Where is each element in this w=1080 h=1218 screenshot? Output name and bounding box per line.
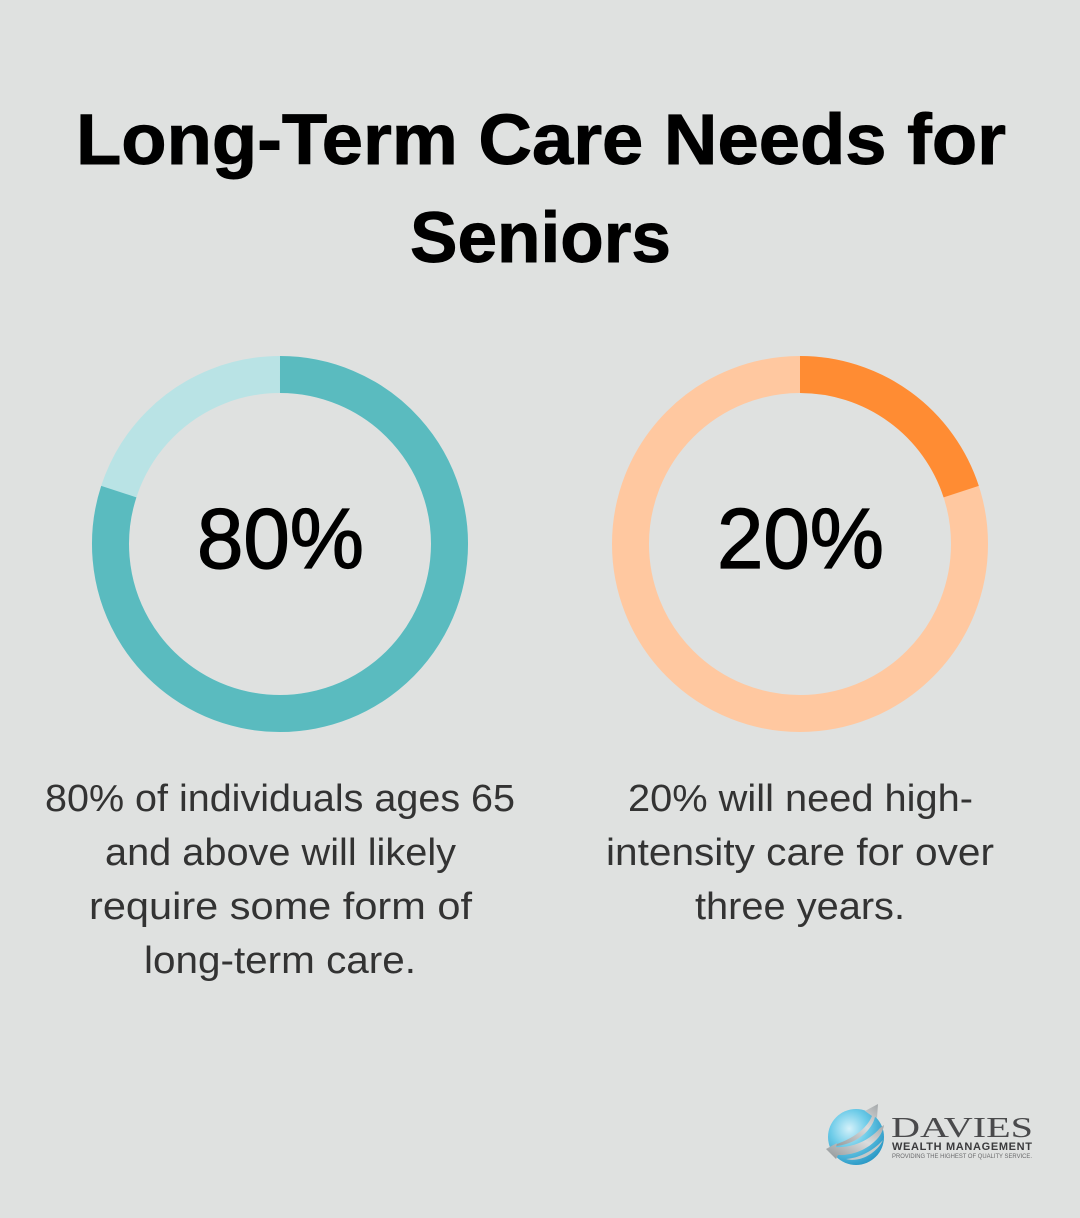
title: [76, 101, 1006, 278]
donut chart: 80%: [110, 374, 449, 714]
title: Seniors: [410, 199, 671, 278]
stat: 20%: 20%: [717, 492, 884, 587]
description: 80%: and above will likely: [105, 832, 456, 874]
description: 20%: 20% will need high-: [628, 778, 973, 820]
description: 80%: long-term care.: [144, 940, 416, 982]
donut chart: 20%: [630, 374, 970, 714]
description: 80%: require some form of: [89, 886, 472, 928]
description: 20%: intensity care for over: [606, 832, 994, 874]
description: 80%: [45, 778, 515, 982]
description: 20%: three years.: [695, 886, 905, 928]
description: 20%: [606, 778, 994, 928]
logo: Davies Wealth Management: [826, 1104, 1033, 1165]
icon: globe with arrows: [826, 1104, 884, 1165]
wordmark: Wealth Management: WEALTH MANAGEMENT: [892, 1141, 1032, 1153]
stat: 80%: 80%: [197, 492, 364, 587]
description: 80%: 80% of individuals ages 65: [45, 778, 515, 820]
tagline: PROVIDING THE HIGHEST OF QUALITY SERVICE.: [892, 1153, 1032, 1160]
title: Long-Term Care Needs for: [76, 101, 1006, 180]
wordmark: DAVIES: DAVIES: [891, 1112, 1033, 1144]
